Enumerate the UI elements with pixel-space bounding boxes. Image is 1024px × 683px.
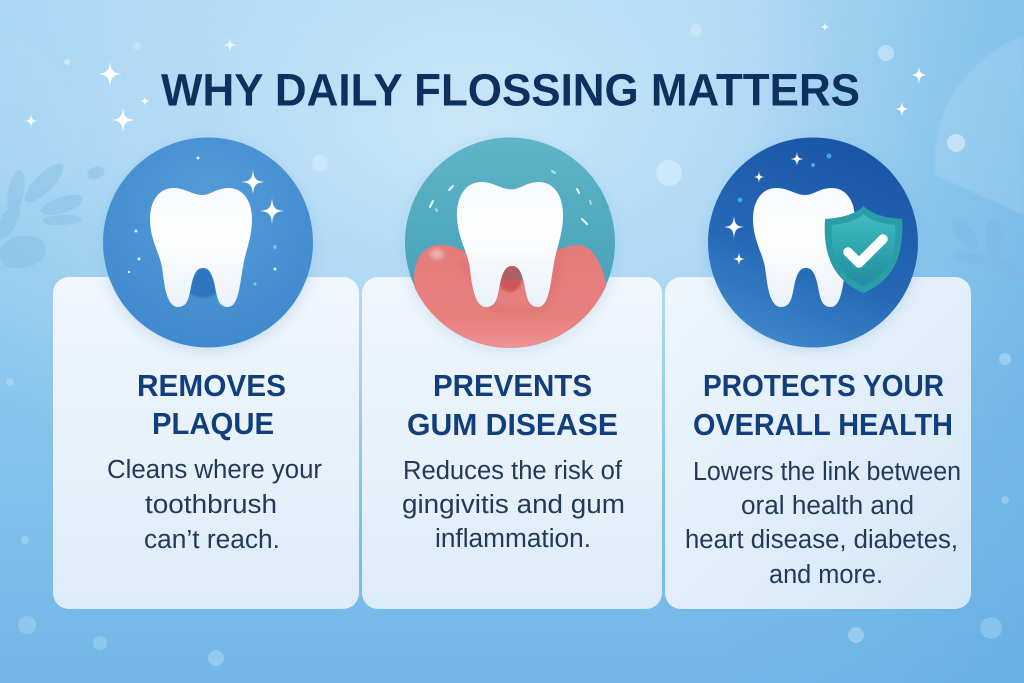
heading: prevents gum disease bbox=[407, 369, 618, 442]
panel: prevents gum disease bbox=[362, 277, 662, 609]
text: prevents gum disease: gingivitis and gum bbox=[402, 491, 625, 519]
text: removes plaque: toothbrush bbox=[145, 491, 277, 519]
text: removes plaque: can’t reach. bbox=[144, 526, 280, 554]
icon: tooth with shield bbox=[707, 138, 919, 352]
heading: removes plaque bbox=[137, 369, 286, 441]
heading: prevents gum disease: GUM DISEASE bbox=[407, 408, 618, 442]
icon: tooth with gums bbox=[404, 138, 616, 352]
icon: shield with check bbox=[825, 206, 902, 293]
text: protects overall health: oral health and bbox=[741, 492, 914, 520]
panel: protects overall health bbox=[665, 277, 971, 609]
heading: removes plaque: PLAQUE bbox=[152, 407, 274, 441]
text: removes plaque bbox=[107, 456, 323, 554]
heading: removes plaque: REMOVES bbox=[137, 369, 286, 403]
text: removes plaque: Cleans where your bbox=[107, 456, 323, 484]
heading: protects overall health: OVERALL HEALTH bbox=[693, 408, 953, 442]
heading: protects overall health bbox=[693, 369, 953, 442]
heading: prevents gum disease: PREVENTS bbox=[433, 369, 592, 403]
decorative leaves right bbox=[947, 216, 1024, 286]
decorative leaves left bbox=[0, 158, 107, 272]
icon: tooth with sparkles bbox=[102, 138, 314, 352]
text: protects overall health: Lowers the link between bbox=[693, 458, 961, 486]
title: WHY DAILY FLOSSING MATTERS bbox=[161, 64, 860, 116]
text: prevents gum disease bbox=[402, 457, 625, 553]
text: protects overall health: heart disease, diabetes, bbox=[685, 526, 958, 554]
text: prevents gum disease: inflammation. bbox=[435, 525, 591, 553]
text: prevents gum disease: Reduces the risk of bbox=[403, 457, 623, 485]
text: protects overall health: and more. bbox=[769, 561, 883, 589]
heading: protects overall health: PROTECTS YOUR bbox=[703, 369, 944, 403]
panel: removes plaque bbox=[53, 277, 359, 609]
sparkles bbox=[24, 22, 927, 133]
text: protects overall health bbox=[685, 458, 961, 589]
